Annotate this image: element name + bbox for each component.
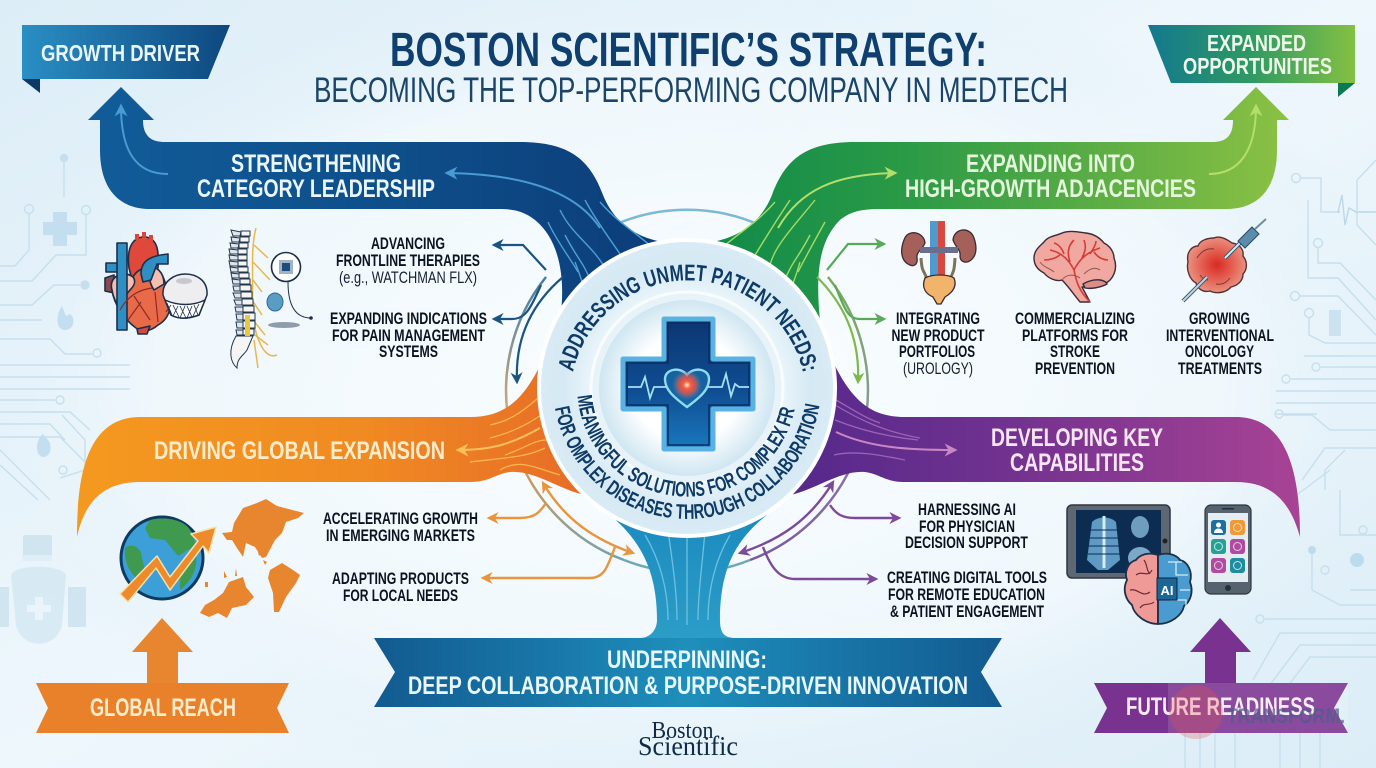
list text: HARNESSING AI: [918, 500, 1016, 519]
logo: Boston Scientific: Boston: [652, 718, 714, 744]
list text: ADVANCING: [371, 234, 445, 253]
list text: FOR PHYSICIAN: [919, 517, 1015, 536]
band arrow: [458, 428, 540, 450]
green branch arrow: [687, 87, 1289, 388]
list text: [892, 309, 1274, 378]
title: [314, 24, 1068, 110]
list text: STROKE: [1050, 342, 1100, 361]
band heading: CAPABILITIES: [1010, 449, 1144, 477]
icon: kidneys and bladder: [902, 221, 976, 304]
banner: underpinning: DEEP COLLABORATION & PURPOSE-DRIVEN INNOVATION: [408, 672, 968, 700]
banner: growth driver: [22, 25, 230, 93]
banner: expanded opportunities: [1148, 25, 1355, 97]
list text: ACCELERATING GROWTH: [323, 509, 478, 528]
list text: NEW PRODUCT: [892, 326, 985, 345]
band heading: [197, 150, 435, 203]
blue branch arrow: [88, 87, 687, 388]
icon: phone with app tiles: [1205, 505, 1251, 594]
band heading: [905, 150, 1196, 203]
branch flow lines: [834, 400, 920, 460]
list text: [887, 500, 1047, 621]
list text: FOR LOCAL NEEDS: [343, 586, 458, 605]
banner: expanded opportunities: OPPORTUNITIES: [1183, 53, 1332, 79]
stem: underpinning: [610, 515, 767, 638]
list text: SYSTEMS: [379, 342, 438, 361]
arrow and banner: global reach: [36, 618, 289, 733]
band heading: DEVELOPING KEY: [991, 424, 1163, 452]
connector arrows: [827, 244, 884, 319]
list text: FRONTLINE THERAPIES: [336, 251, 480, 270]
list text: DECISION SUPPORT: [905, 533, 1028, 552]
central hub: [537, 238, 837, 538]
stem flow lines: [645, 520, 730, 625]
band heading: CATEGORY LEADERSHIP: [197, 175, 435, 203]
icon: medical cross: [623, 319, 753, 449]
curved text top: ADDRESSING UNMET PATIENT NEEDS:: [558, 264, 816, 372]
background medical device left: [0, 535, 86, 644]
logo: Boston Scientific: [638, 718, 738, 761]
list text: IN EMERGING MARKETS: [326, 526, 475, 545]
orange branch band: [77, 355, 687, 537]
list text: (UROLOGY): [903, 359, 973, 378]
background circuit pattern right: [1185, 160, 1376, 768]
list text: FOR REMOTE EDUCATION: [888, 585, 1045, 604]
connector arrows: [740, 482, 899, 579]
list text: COMMERCIALIZING: [1015, 309, 1135, 328]
list text: ADAPTING PRODUCTS: [332, 569, 469, 588]
icon: tumor with probe: [1183, 219, 1266, 301]
banner: expanded opportunities: EXPANDED: [1207, 30, 1306, 56]
connector arrows: [483, 483, 633, 578]
branch flow lines: [548, 200, 655, 298]
icon: spine with implant: [229, 228, 313, 368]
branch flow lines: [470, 392, 560, 475]
icon: heart: [105, 232, 171, 334]
icon: globe with growth arrow: [120, 517, 216, 602]
panel: driving global expansion: [36, 355, 687, 733]
list text: & PATIENT ENGAGEMENT: [890, 602, 1044, 621]
list text: ONCOLOGY: [1185, 342, 1254, 361]
branch flow lines: [720, 200, 825, 298]
list text: [323, 509, 478, 605]
list text: (e.g., WATCHMAN FLX): [339, 268, 477, 287]
logo: Boston Scientific: Scientific: [638, 731, 738, 761]
list text: EXPANDING INDICATIONS: [330, 309, 487, 328]
curved text line one: MEANINGFUL SOLUTIONS FOR COMPLEX FR: [578, 394, 795, 497]
arrow and banner: future readiness: FUTURE READINESS: [1126, 693, 1315, 721]
watermark: [1168, 683, 1348, 739]
band arrows: [778, 106, 1256, 228]
list text: PREVENTION: [1035, 359, 1115, 378]
purple branch band: [687, 355, 1300, 537]
arrow and banner: global reach: GLOBAL REACH: [90, 694, 236, 722]
panel: developing key capabilities: [687, 355, 1348, 733]
list text: CREATING DIGITAL TOOLS: [887, 568, 1047, 587]
curved text line two: FOR OMPLEX DISEASES THROUGH COLLABORATION: [555, 404, 820, 519]
arrow and banner: future readiness: [1094, 618, 1348, 733]
band heading: [991, 424, 1163, 477]
band heading: DRIVING GLOBAL EXPANSION: [154, 437, 445, 465]
icon label: AI: AI: [1160, 583, 1174, 598]
icon: tablet with scans: [1067, 505, 1170, 578]
thin ring around hub: [506, 210, 868, 570]
band arrow: [836, 432, 955, 450]
icon: watchman device: [163, 274, 207, 318]
icon: brain: [1034, 231, 1116, 302]
list text: GROWING: [1189, 309, 1250, 328]
list text: INTERVENTIONAL: [1166, 326, 1274, 345]
panel: strengthening category leadership: [88, 87, 687, 388]
band heading: STRENGTHENING: [231, 150, 401, 178]
panel: expanding into high-growth adjacencies: [687, 87, 1289, 388]
watermark: TRANSFORM.: [1227, 705, 1345, 728]
title: BOSTON SCIENTIFIC’S STRATEGY:: [390, 24, 987, 77]
subtitle: BECOMING THE TOP-PERFORMING COMPANY IN MEDTECH: [314, 71, 1068, 110]
band heading: EXPANDING INTO: [966, 150, 1135, 178]
background circuit pattern left: [0, 154, 130, 500]
list text: PORTFOLIOS: [899, 342, 975, 361]
icon: AI brain: [1125, 554, 1192, 624]
banner: underpinning: [374, 638, 1002, 707]
band heading: HIGH-GROWTH ADJACENCIES: [905, 175, 1196, 203]
list text: TREATMENTS: [1178, 359, 1262, 378]
list text: INTEGRATING: [896, 309, 980, 328]
connector arrows: [494, 245, 563, 382]
list text: PLATFORMS FOR: [1022, 326, 1128, 345]
band arrows: [121, 106, 600, 228]
banner: growth driver: GROWTH DRIVER: [41, 40, 200, 66]
list text: FOR PAIN MANAGEMENT: [332, 326, 485, 345]
list text: [330, 234, 487, 361]
banner: underpinning: UNDERPINNING:: [607, 646, 767, 674]
icon: world map: [200, 499, 304, 618]
